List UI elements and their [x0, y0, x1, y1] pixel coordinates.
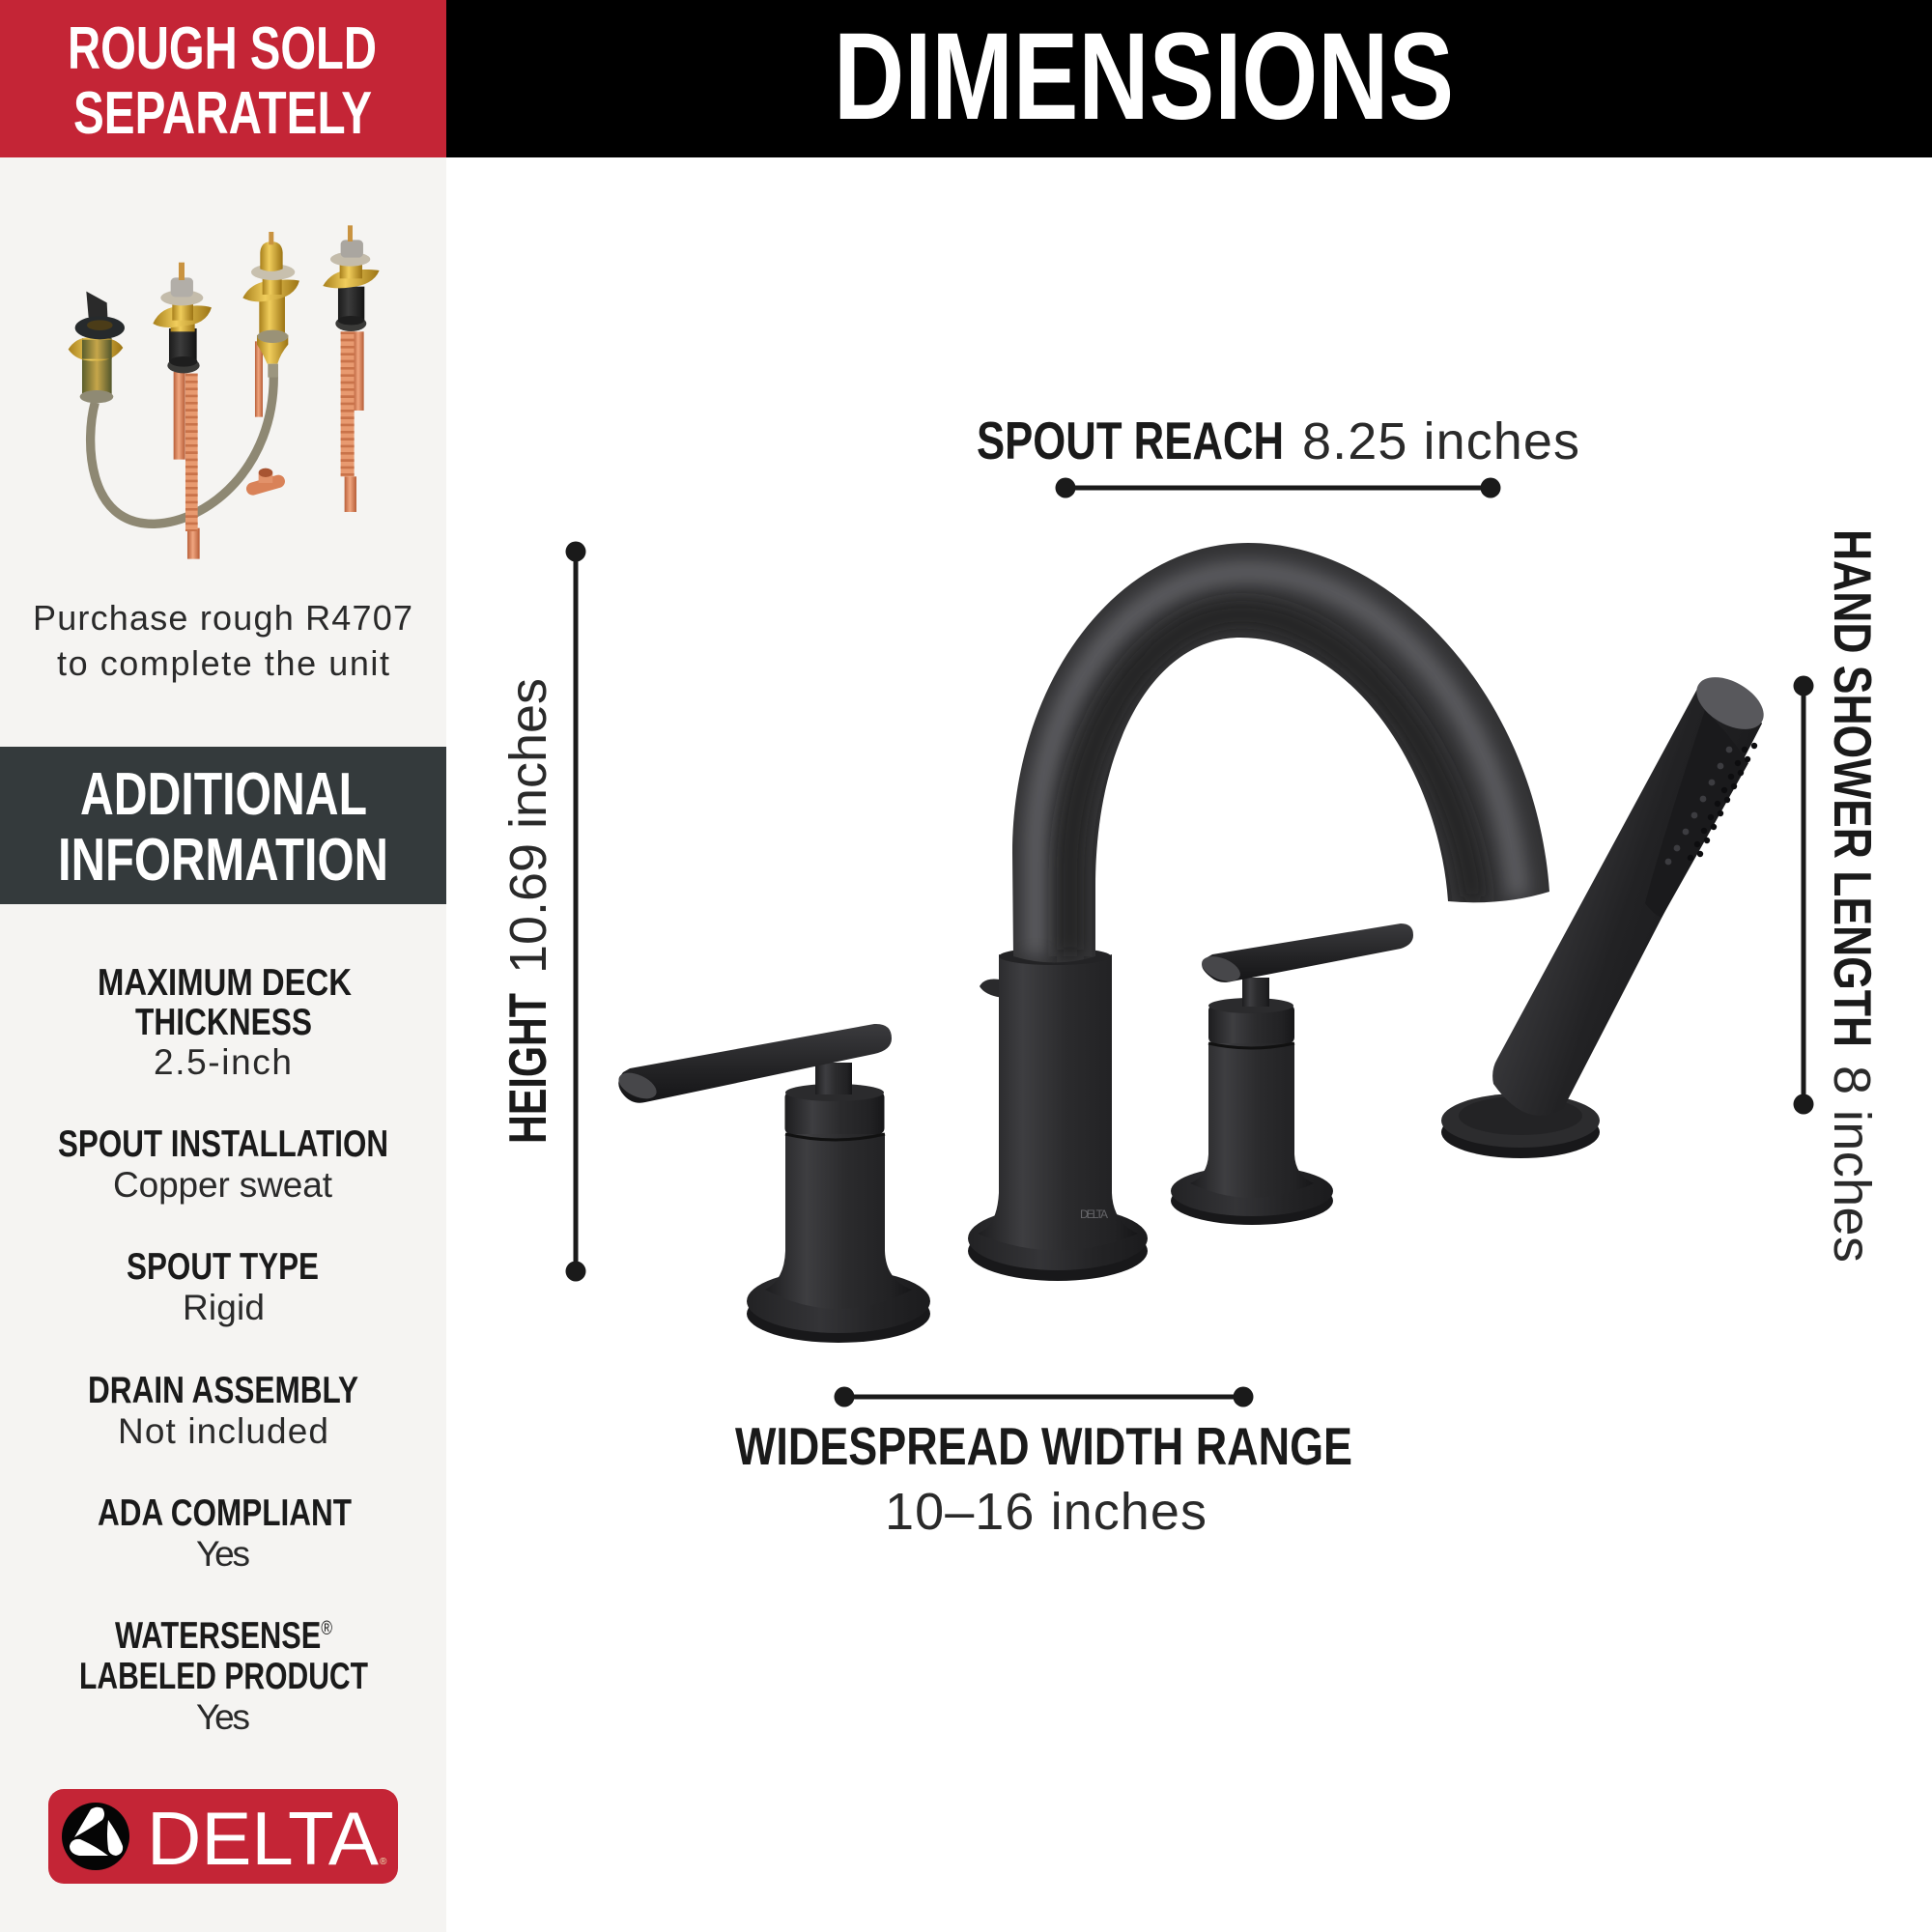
text: purchase rough note: Purchase rough R4707: [33, 598, 412, 638]
spec: watersense labeled product: Yes: [196, 1697, 250, 1737]
dimension: hand shower length: HAND SHOWER LENGTH: [1823, 529, 1883, 1047]
spec: spout installation: SPOUT INSTALLATION: [58, 1123, 388, 1165]
logo: delta: [48, 1789, 398, 1884]
spec: ada compliant: ADA COMPLIANT: [98, 1492, 352, 1534]
text: purchase rough note: to complete the unit: [57, 643, 389, 683]
dimension: spout reach: [977, 411, 1579, 498]
text: purchase rough note: [33, 598, 412, 683]
spec: maximum deck thickness: MAXIMUM DECK: [98, 962, 352, 1004]
heading: rough sold separately: SEPARATELY: [73, 80, 372, 147]
dimension: height: 10.69 inches: [499, 678, 557, 974]
heading: dimensions: [446, 0, 1932, 157]
spec: watersense labeled product: LABELED PRODUCT: [79, 1656, 368, 1697]
hand shower: [1441, 667, 1773, 1158]
heading: additional information: INFORMATION: [58, 827, 388, 894]
logo: delta: DELTA: [147, 1796, 379, 1881]
dimension: hand shower length: [1793, 529, 1883, 1263]
dimension: hand shower length: 8 inches: [1823, 1065, 1881, 1263]
right handle: [1171, 923, 1413, 1225]
spec: watersense labeled product: [79, 1615, 368, 1737]
dimension: spout reach: 8.25 inches: [1302, 412, 1579, 470]
spout arc: [1012, 543, 1549, 962]
spec: spout type: Rigid: [183, 1288, 265, 1327]
spec: maximum deck thickness: [98, 962, 352, 1082]
image: faucet set: [614, 543, 1773, 1343]
spec: watersense labeled product: WATERSENSE: [115, 1615, 376, 1657]
spray nozzle dots: [1665, 743, 1757, 865]
heading: additional information: ADDITIONAL: [80, 761, 367, 828]
dimension: spout reach: SPOUT REACH: [977, 411, 1284, 470]
logo: delta: ®: [380, 1857, 387, 1867]
spec: spout type: SPOUT TYPE: [127, 1246, 319, 1288]
left handle: [614, 1024, 930, 1343]
heading: dimensions: DIMENSIONS: [834, 8, 1454, 146]
heading: rough sold separately: [0, 0, 446, 157]
spec: drain assembly: [88, 1370, 358, 1451]
dimension: widespread width range: [735, 1387, 1352, 1541]
spec: maximum deck thickness: 2.5-inch: [154, 1042, 292, 1082]
spec: spout type: [127, 1246, 319, 1327]
spec: spout installation: Copper sweat: [113, 1165, 333, 1205]
spec: drain assembly: DRAIN ASSEMBLY: [88, 1370, 358, 1411]
spec: ada compliant: Yes: [196, 1534, 250, 1574]
dimension: height: [497, 541, 585, 1281]
heading: rough sold separately: ROUGH SOLD: [68, 15, 377, 82]
spout body and base: [968, 948, 1148, 1281]
spec: ada compliant: [98, 1492, 352, 1574]
dimension: widespread width range: WIDESPREAD WIDTH RANGE: [735, 1416, 1352, 1476]
dimension: widespread width range: 10–16 inches: [885, 1483, 1207, 1541]
spec: spout installation: [58, 1123, 388, 1205]
spout body and base: DELTA: [1080, 1208, 1108, 1221]
panel: left sidebar: [0, 0, 446, 1932]
spec: maximum deck thickness: THICKNESS: [135, 1002, 312, 1043]
dimension: height: HEIGHT: [497, 993, 557, 1144]
heading: additional information: [0, 747, 446, 904]
image: rough valve parts: [69, 225, 380, 559]
spec: drain assembly: Not included: [118, 1411, 328, 1451]
spec: watersense labeled product: ®: [321, 1618, 332, 1639]
